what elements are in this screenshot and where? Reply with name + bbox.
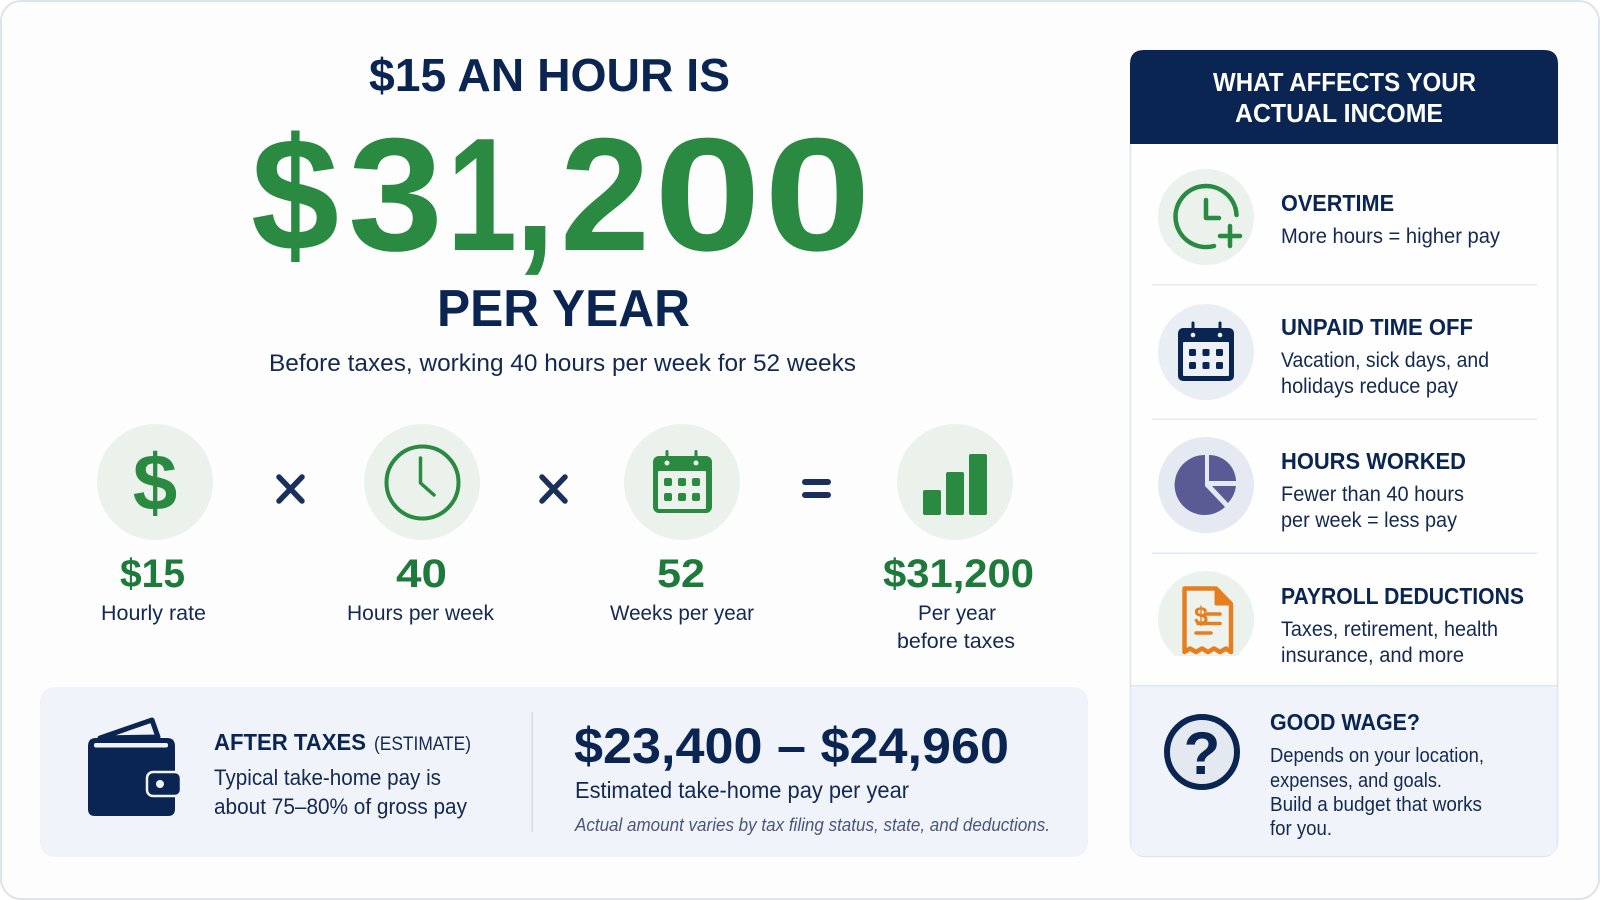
text: good wage detail: for you. [1270,818,1332,840]
text: good wage detail [1270,745,1484,840]
item: payroll deductions [1158,571,1524,667]
text: unpaid time off detail [1281,349,1489,398]
heading: after taxes [214,729,471,755]
item: overtime [1158,169,1500,265]
text: good wage detail: expenses, and goals. [1270,770,1442,792]
text: payroll deductions detail [1281,618,1498,667]
icon: calendar [1158,304,1254,400]
value: 52: 52 [657,552,705,596]
headline figure: $31,200: 3 [348,105,443,285]
value: take-home range: $23,400 – $24,960 [574,718,1009,774]
icon: dollar sign [97,424,213,540]
heading: good wage: GOOD WAGE? [1270,709,1420,735]
icon: clock [364,424,480,540]
label: hourly rate: Hourly rate [101,602,206,625]
panel header: ACTUAL INCOME [1235,98,1443,128]
formula step: annual total [883,424,1034,653]
panel: what affects your actual income [1130,50,1558,856]
operator: multiply [279,477,302,501]
callout: good wage [1131,685,1557,856]
text: overtime detail: More hours = higher pay [1281,225,1500,248]
panel header: WHAT AFFECTS YOUR [1213,67,1476,97]
label: per year before taxes [897,602,1015,653]
text: payroll deductions detail: Taxes, retirement, health [1281,618,1498,641]
heading: payroll deductions: PAYROLL DEDUCTIONS [1281,583,1524,609]
label: per year before taxes: Per year [918,602,996,625]
icon: calendar [624,424,740,540]
heading: after taxes: (ESTIMATE) [374,734,471,755]
text: hours worked detail: Fewer than 40 hours [1281,483,1464,506]
headline figure: $31,200: 1 [447,105,517,285]
headline figure: $31,200: $ [251,105,339,285]
heading: overtime: OVERTIME [1281,190,1394,216]
icon: question mark: ? [1184,720,1220,787]
text: good wage detail: Build a budget that works [1270,794,1482,816]
icon: receipt [1158,571,1254,656]
heading: per year: PER YEAR [437,280,690,338]
text: take-home share [214,765,467,819]
text: good wage detail: Depends on your location, [1270,745,1484,767]
headline figure: $31,200: 0 [654,105,761,285]
operator: multiply [542,477,565,501]
icon: bar chart [897,424,1013,540]
headline figure: $31,200: 0 [764,105,871,285]
headline figure: $31,200 [251,105,871,285]
item: hours worked [1158,437,1466,533]
value: $31,200: $31,200 [883,552,1034,596]
heading: after taxes: AFTER TAXES [214,729,366,755]
headline figure: $31,200: 2 [560,105,650,285]
operator: equals [802,479,831,498]
text: unpaid time off detail: holidays reduce pay [1281,375,1458,398]
text: hours worked detail [1281,483,1464,532]
panel header [1130,50,1558,144]
icon: wallet [88,720,181,816]
formula step: hours per week [347,424,494,625]
icon: dollar sign: $ [133,438,177,527]
note: variation disclaimer: Actual amount varies by tax filing status, state, and deductions. [574,815,1050,835]
label: weeks per year: Weeks per year [610,602,754,625]
headline figure: $31,200: , [515,105,555,285]
text: take-home share: about 75–80% of gross pay [214,794,467,819]
formula step: hourly rate [97,424,213,625]
item: unpaid time off [1158,304,1489,400]
icon: question mark [1167,717,1237,787]
text: take-home share: Typical take-home pay is [214,765,441,790]
text: estimated take-home: Estimated take-home pay per year [575,777,909,803]
heading: hours worked: HOURS WORKED [1281,448,1466,474]
text: hours worked detail: per week = less pay [1281,509,1457,532]
heading: unpaid time off: UNPAID TIME OFF [1281,314,1473,340]
value: $15: $15 [120,552,185,596]
formula step: weeks per year [610,424,754,625]
title: $15 an hour is: $15 AN HOUR IS [369,49,730,101]
panel: after taxes estimate [40,687,1088,857]
text: payroll deductions detail: insurance, and more [1281,644,1464,667]
icon: receipt: $ [1194,602,1208,630]
icon: clock with plus [1158,169,1254,265]
text: unpaid time off detail: Vacation, sick days, and [1281,349,1489,372]
label: per year before taxes: before taxes [897,630,1015,653]
subtitle: Before taxes, working 40 hours per week for 52 weeks [269,350,856,377]
label: hours per week: Hours per week [347,602,494,625]
icon: pie chart [1158,437,1254,533]
value: 40: 40 [396,552,447,596]
